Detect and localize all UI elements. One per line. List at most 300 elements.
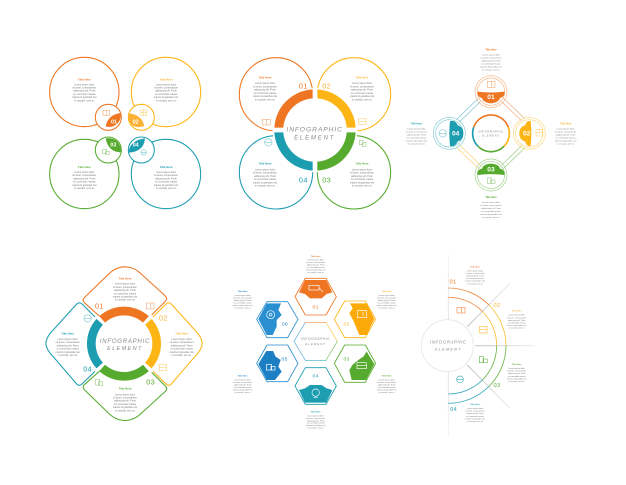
arcs 04 <box>448 380 489 403</box>
text block 04: adipiscing elit. Proin <box>407 133 427 136</box>
text block 03: mauris id gravidas nisi <box>350 181 375 184</box>
text block 04: adipiscing elit. Proin <box>155 177 178 180</box>
text block 01: Lorem ipsum dolor <box>74 83 95 86</box>
text block 03: mauris id gravidas nisi <box>72 184 97 187</box>
icon: 03 <box>479 357 487 363</box>
text block 04: mauris id gravidas nisi <box>253 181 278 184</box>
text block 05: Lorem ipsum dolor <box>234 379 251 382</box>
text block 01: mauris id gravidas nisi <box>306 269 326 272</box>
text block 01: eu commodo massa <box>481 63 502 65</box>
text block 03: mauris id gravidas nisi <box>113 406 138 409</box>
vertical axis and rays <box>448 255 535 437</box>
panel: ring with rounded diamonds <box>46 267 202 420</box>
number 02: 02 <box>322 81 331 90</box>
text block 02: mauris id gravidas nisi <box>350 95 375 98</box>
text block 05 <box>233 375 253 394</box>
text block 04: eu commodo massa <box>254 178 277 181</box>
text block 02: sit amet, consectetuer <box>555 130 577 133</box>
text block 01: in suscipit, sem at. <box>467 282 484 285</box>
centre title: INFOGRAPHIC <box>478 129 504 133</box>
text block 01: Lorem ipsum dolor <box>255 82 275 85</box>
text block 02: adipiscing elit. Proin <box>556 133 576 136</box>
white centre mask <box>273 88 357 172</box>
centre title <box>286 126 343 141</box>
text block 05: sit amet, consectetuer <box>233 381 253 384</box>
text block 03: in suscipit, sem at. <box>379 391 395 394</box>
text block 01 <box>113 276 138 302</box>
panel: half circle arcs <box>421 255 535 437</box>
text block 06: mauris id gravidas nisi <box>233 304 253 307</box>
text block 02: eu commodo massa <box>378 302 396 304</box>
ring segment 04 <box>274 132 313 171</box>
icon: 03 <box>359 140 366 146</box>
text block 02 <box>555 122 577 145</box>
arcs 02 <box>482 305 506 346</box>
text block 02: Lorem ipsum dolor <box>378 294 395 297</box>
text block 01: Title Here <box>259 75 272 79</box>
badge 01 <box>95 104 121 130</box>
text block 06 <box>233 290 253 309</box>
text block 02: Title Here <box>382 290 392 293</box>
text block 01: mauris id gravidas nisi <box>72 96 97 99</box>
hexagon 06 <box>257 302 298 338</box>
text block 02: eu commodo massa <box>171 348 193 351</box>
text block 04: mauris id gravidas nisi <box>306 424 326 427</box>
text block 01: sit amet, consectetuer <box>72 87 97 90</box>
text block 05: Title Here <box>238 375 248 378</box>
ring segment 01 <box>274 89 313 128</box>
text block 02: sit amet, consectetuer <box>170 341 194 344</box>
text block 01: in suscipit, sem at. <box>74 99 95 102</box>
text block 03: sit amet, consectetuer <box>350 172 374 175</box>
text block 02: mauris id gravidas nisi <box>377 304 397 307</box>
icon: 04 <box>457 376 463 383</box>
hexagon 02: 02 <box>344 322 350 328</box>
text block 06: Title Here <box>238 290 248 293</box>
text block 05: mauris id gravidas nisi <box>233 389 253 392</box>
text block 04 <box>465 403 485 423</box>
text block 03: Title Here <box>512 363 522 366</box>
arcs 03 <box>482 346 506 386</box>
text block 04: Lorem ipsum dolor <box>255 168 275 171</box>
text block 01: adipiscing elit. Proin <box>254 89 277 92</box>
text block 02: mauris id gravidas nisi <box>154 96 179 99</box>
text block 01: sit amet, consectetuer <box>113 286 137 289</box>
text block 01: Title Here <box>78 78 91 82</box>
centre title: INFOGRAPHIC <box>286 126 343 133</box>
text block 02: Lorem ipsum dolor <box>156 83 176 86</box>
text block 04: in suscipit, sem at. <box>255 185 275 188</box>
text block 03: Lorem ipsum dolor <box>74 171 95 174</box>
text block 02: Lorem ipsum dolor <box>352 82 372 85</box>
text block 01: adipiscing elit. Proin <box>481 59 502 62</box>
centre title <box>430 340 467 351</box>
text block 02: in suscipit, sem at. <box>172 354 192 357</box>
text block 04 <box>253 162 278 188</box>
text block 02: eu commodo massa <box>351 92 374 95</box>
text block 02: sit amet, consectetuer <box>154 87 178 90</box>
text block 02: Title Here <box>160 78 173 82</box>
text block 03: Lorem ipsum dolor <box>482 201 500 204</box>
text block 02: in suscipit, sem at. <box>156 99 176 102</box>
number 03: 03 <box>146 377 155 386</box>
centre title: ELEMENT <box>294 135 335 141</box>
centre title: INFOGRAPHIC <box>430 340 467 345</box>
text block 01: sit amet, consectetuer <box>465 272 485 275</box>
text block 02 <box>350 75 375 101</box>
hexagon 04: 04 <box>313 374 319 380</box>
badge 02 <box>513 117 545 149</box>
text block 03 <box>350 162 375 188</box>
text block 01 <box>253 75 278 101</box>
text block 04: sit amet, consectetuer <box>154 174 178 177</box>
text block 02: sit amet, consectetuer <box>507 316 527 319</box>
badge 01: 01 <box>487 94 495 101</box>
text block 02: Title Here <box>560 122 572 125</box>
text block 01 <box>480 49 502 71</box>
badge 03: 03 <box>487 167 495 174</box>
badge 02 <box>128 104 154 130</box>
centre ring <box>473 115 509 152</box>
text block 04: mauris id gravidas nisi <box>154 184 179 187</box>
badge 01: 01 <box>111 120 117 126</box>
text block 04: sit amet, consectetuer <box>465 410 485 413</box>
text block 03: sit amet, consectetuer <box>377 381 397 384</box>
text block 02: adipiscing elit. Proin <box>351 89 374 92</box>
hexagon 05 <box>257 345 298 382</box>
text block 04: in suscipit, sem at. <box>308 427 324 430</box>
text block 02: adipiscing elit. Proin <box>508 319 525 322</box>
text block 02: mauris id gravidas nisi <box>170 351 194 354</box>
hexagon 03: 03 <box>344 357 350 363</box>
centre title <box>301 337 330 346</box>
text block 04 <box>406 122 428 145</box>
text block 01: eu commodo massa <box>307 267 325 269</box>
badge 03: 03 <box>110 143 116 149</box>
text block 05: eu commodo massa <box>234 387 252 389</box>
circle: step 02 outline <box>131 57 201 127</box>
text block 03: in suscipit, sem at. <box>352 185 372 188</box>
text block 04 <box>56 331 80 357</box>
text block 02: adipiscing elit. Proin <box>378 299 395 302</box>
icon: 02 <box>359 119 366 125</box>
badge 04 <box>128 137 154 163</box>
hexagon 03 <box>334 345 376 382</box>
text block 03: adipiscing elit. Proin <box>378 384 395 387</box>
text block 04: eu commodo massa <box>466 416 485 418</box>
text block 03: Lorem ipsum dolor <box>352 168 372 171</box>
text block 04: in suscipit, sem at. <box>467 420 484 423</box>
text block 05: in suscipit, sem at. <box>235 391 251 394</box>
text block 04: adipiscing elit. Proin <box>57 344 79 347</box>
text block 03 <box>507 363 527 383</box>
ring segment 04 <box>87 319 103 368</box>
text block 02: mauris id gravidas nisi <box>507 324 527 327</box>
text block 02: in suscipit, sem at. <box>352 98 372 101</box>
icon: 03 <box>96 379 103 385</box>
number 03: 03 <box>494 383 500 389</box>
ring segment 01 <box>99 307 149 323</box>
text block 02: in suscipit, sem at. <box>557 142 575 145</box>
text block 03: mauris id gravidas nisi <box>377 389 397 392</box>
text block 03: Title Here <box>382 375 392 378</box>
text block 03: adipiscing elit. Proin <box>351 175 374 178</box>
text block 03: adipiscing elit. Proin <box>114 400 137 403</box>
text block 01: mauris id gravidas nisi <box>113 295 138 298</box>
text block 04: Title Here <box>61 331 75 335</box>
panel: hexagon cluster <box>233 255 397 430</box>
text block 04: sit amet, consectetuer <box>306 417 326 420</box>
number 02: 02 <box>494 303 500 309</box>
text block 04 <box>154 165 179 190</box>
text block 01: mauris id gravidas nisi <box>253 95 278 98</box>
text block 01: eu commodo massa <box>254 92 277 95</box>
text block 04: adipiscing elit. Proin <box>254 175 277 178</box>
text block 01: in suscipit, sem at. <box>115 299 135 302</box>
circle: step 02 outline <box>317 58 391 131</box>
text block 02 <box>154 78 179 102</box>
text block 03: adipiscing elit. Proin <box>508 372 525 375</box>
text block 03: Lorem ipsum dolor <box>508 367 525 370</box>
outline 04 <box>46 303 95 385</box>
text block 04: Title Here <box>160 165 173 169</box>
ring segment 03 <box>317 132 356 171</box>
text block 06: in suscipit, sem at. <box>235 306 251 309</box>
text block 04: adipiscing elit. Proin <box>307 419 324 422</box>
text block 04: Lorem ipsum dolor <box>307 414 324 417</box>
text block 04 <box>306 410 326 430</box>
text block 04: Lorem ipsum dolor <box>407 127 426 130</box>
ring segment 02 <box>145 319 161 368</box>
text block 06: adipiscing elit. Proin <box>234 299 251 302</box>
text block 01: Title Here <box>470 265 481 268</box>
text block 02: Lorem ipsum dolor <box>172 338 192 341</box>
text block 01 <box>465 265 485 285</box>
circle: step 03 outline <box>50 139 119 209</box>
centre title <box>478 129 504 138</box>
text block 01: eu commodo massa <box>466 278 485 280</box>
circle: step 04 outline <box>131 139 201 209</box>
text block 03: sit amet, consectetuer <box>113 397 137 400</box>
text block 02: Lorem ipsum dolor <box>508 314 525 317</box>
text block 04: eu commodo massa <box>57 348 79 351</box>
centre title: INFOGRAPHIC <box>100 339 150 345</box>
icon: 01 <box>457 307 465 313</box>
hexagon 04 <box>295 368 336 404</box>
text block 03 <box>113 387 138 412</box>
text block 01: Lorem ipsum dolor <box>482 53 500 56</box>
hexagon 06: 06 <box>282 321 288 327</box>
text block 01: mauris id gravidas nisi <box>480 65 502 68</box>
text block 04: in suscipit, sem at. <box>156 187 176 190</box>
text block 03: eu commodo massa <box>508 376 526 378</box>
badge 02: 02 <box>133 120 139 126</box>
text block 03: sit amet, consectetuer <box>480 204 502 207</box>
panel: four circles with small badges <box>50 57 201 209</box>
outline 02 <box>153 303 202 385</box>
text block 03: eu commodo massa <box>114 403 137 406</box>
badge 04 <box>433 117 465 149</box>
number 01: 01 <box>299 81 308 90</box>
text block 03 <box>480 196 502 219</box>
text block 04: mauris id gravidas nisi <box>56 351 80 354</box>
text block 03: Title Here <box>356 162 369 166</box>
text block 04: Lorem ipsum dolor <box>156 171 176 174</box>
centre title: ELEMENT <box>305 342 326 346</box>
text block 04: Title Here <box>259 162 272 166</box>
text block 03: Lorem ipsum dolor <box>115 393 135 396</box>
text block 03: sit amet, consectetuer <box>72 174 97 177</box>
text block 01: sit amet, consectetuer <box>306 261 326 264</box>
text block 04: adipiscing elit. Proin <box>466 412 484 415</box>
text block 01: adipiscing elit. Proin <box>73 90 96 93</box>
icon: 02 <box>480 326 487 333</box>
text block 04: Title Here <box>470 403 481 406</box>
text block 03: in suscipit, sem at. <box>482 216 500 219</box>
text block 02: in suscipit, sem at. <box>379 306 395 309</box>
text block 01: in suscipit, sem at. <box>482 68 500 71</box>
text block 02: sit amet, consectetuer <box>377 296 397 299</box>
text block 02: mauris id gravidas nisi <box>555 139 577 142</box>
text block 01 <box>72 78 97 102</box>
badge 03 <box>475 159 507 191</box>
ring segment 02 <box>317 89 356 128</box>
circle: step 01 outline <box>239 58 313 131</box>
text block 06: Lorem ipsum dolor <box>234 294 251 297</box>
text block 01: sit amet, consectetuer <box>253 85 277 88</box>
text block 04: Lorem ipsum dolor <box>467 407 484 410</box>
text block 01 <box>306 255 326 274</box>
icon: 01 <box>146 303 154 309</box>
number 01: 01 <box>95 301 104 310</box>
centre title: ELEMENT <box>482 134 500 138</box>
number 04: 04 <box>450 407 457 413</box>
centre hexagon <box>294 322 337 360</box>
number 02: 02 <box>159 313 168 322</box>
arcs 01 <box>448 288 489 311</box>
circle: step 03 outline <box>317 136 391 209</box>
text block 02: eu commodo massa <box>155 93 178 96</box>
text block 03: adipiscing elit. Proin <box>481 207 502 210</box>
text block 02: Title Here <box>175 331 189 335</box>
text block 04: sit amet, consectetuer <box>406 130 427 133</box>
ring segment 03 <box>99 365 149 381</box>
icon: 02 <box>159 364 167 371</box>
centre circle <box>421 320 473 372</box>
text block 04: Lorem ipsum dolor <box>58 338 78 341</box>
number 03: 03 <box>322 175 331 184</box>
text block 04: sit amet, consectetuer <box>253 172 277 175</box>
text block 04: eu commodo massa <box>406 137 427 139</box>
text block 02: eu commodo massa <box>556 137 576 139</box>
connectors <box>457 97 525 170</box>
hexagon 02 <box>334 301 376 338</box>
badge 01 <box>475 76 507 108</box>
text block 01: Title Here <box>485 49 497 52</box>
text block 05: adipiscing elit. Proin <box>234 384 251 387</box>
text block 03: Title Here <box>119 387 132 391</box>
text block 03: in suscipit, sem at. <box>115 409 135 412</box>
text block 04: in suscipit, sem at. <box>407 142 426 145</box>
text block 04: Title Here <box>411 122 423 125</box>
text block 03: sit amet, consectetuer <box>507 370 527 373</box>
text block 02 <box>507 310 527 330</box>
text block 02: adipiscing elit. Proin <box>171 344 193 347</box>
text block 01: Lorem ipsum dolor <box>307 259 324 262</box>
text block 03: Title Here <box>485 196 497 199</box>
text block 03: Lorem ipsum dolor <box>378 379 395 382</box>
text block 03: adipiscing elit. Proin <box>73 177 96 180</box>
text block 02: sit amet, consectetuer <box>350 85 374 88</box>
text block 02: adipiscing elit. Proin <box>155 90 178 93</box>
text block 04: in suscipit, sem at. <box>58 354 78 357</box>
text block 06: eu commodo massa <box>234 302 252 304</box>
text block 04: eu commodo massa <box>155 181 178 184</box>
outline 03 <box>83 371 167 420</box>
text block 02: in suscipit, sem at. <box>509 327 525 330</box>
text block 01: in suscipit, sem at. <box>308 271 324 274</box>
centre title: ELEMENT <box>435 346 461 351</box>
panel: ring with four large circles <box>239 58 391 209</box>
hexagon 05: 05 <box>282 357 288 363</box>
text block 04: sit amet, consectetuer <box>56 341 80 344</box>
icon: 04 <box>84 315 91 322</box>
text block 01: adipiscing elit. Proin <box>114 289 137 292</box>
text block 02: Title Here <box>356 75 369 79</box>
text block 02 <box>377 290 397 309</box>
text block 01: Lorem ipsum dolor <box>467 269 484 272</box>
badge 03 <box>95 137 121 163</box>
text block 03: eu commodo massa <box>351 178 374 181</box>
badge 04: 04 <box>133 143 139 149</box>
text block 01: in suscipit, sem at. <box>255 98 275 101</box>
text block 01: Title Here <box>311 255 321 258</box>
text block 02 <box>170 331 194 357</box>
icon: 04 <box>265 139 272 146</box>
text block 01: sit amet, consectetuer <box>480 56 502 59</box>
text block 06: sit amet, consectetuer <box>233 296 253 299</box>
text block 03: eu commodo massa <box>73 181 96 184</box>
text block 03 <box>377 375 397 394</box>
icon: 01 <box>262 119 270 125</box>
text block 01: Title Here <box>119 276 132 280</box>
text block 01: eu commodo massa <box>114 292 137 295</box>
text block 01: adipiscing elit. Proin <box>307 264 324 267</box>
text block 02: Lorem ipsum dolor <box>557 127 575 130</box>
text block 04: Title Here <box>311 410 321 413</box>
circle: step 01 outline <box>50 57 119 127</box>
text block 03: mauris id gravidas nisi <box>507 377 527 380</box>
centre title <box>100 339 150 352</box>
text block 01: Lorem ipsum dolor <box>115 283 135 286</box>
outline 01 <box>83 267 167 316</box>
circle: step 04 outline <box>239 136 313 209</box>
text block 04: eu commodo massa <box>307 423 325 425</box>
text block 01: adipiscing elit. Proin <box>466 275 484 278</box>
hexagon 01 <box>295 278 336 315</box>
text block 04: mauris id gravidas nisi <box>406 139 428 142</box>
text block 03: in suscipit, sem at. <box>74 187 95 190</box>
number 04: 04 <box>83 365 92 374</box>
text block 03: Title Here <box>78 165 91 169</box>
badge 02: 02 <box>523 131 531 138</box>
text block 03: eu commodo massa <box>481 211 502 213</box>
text block 03: eu commodo massa <box>378 387 396 389</box>
number 01: 01 <box>450 280 456 286</box>
panel: diamond of four badges <box>406 49 577 219</box>
text block 04: mauris id gravidas nisi <box>465 417 485 420</box>
centre title: INFOGRAPHIC <box>301 337 330 341</box>
